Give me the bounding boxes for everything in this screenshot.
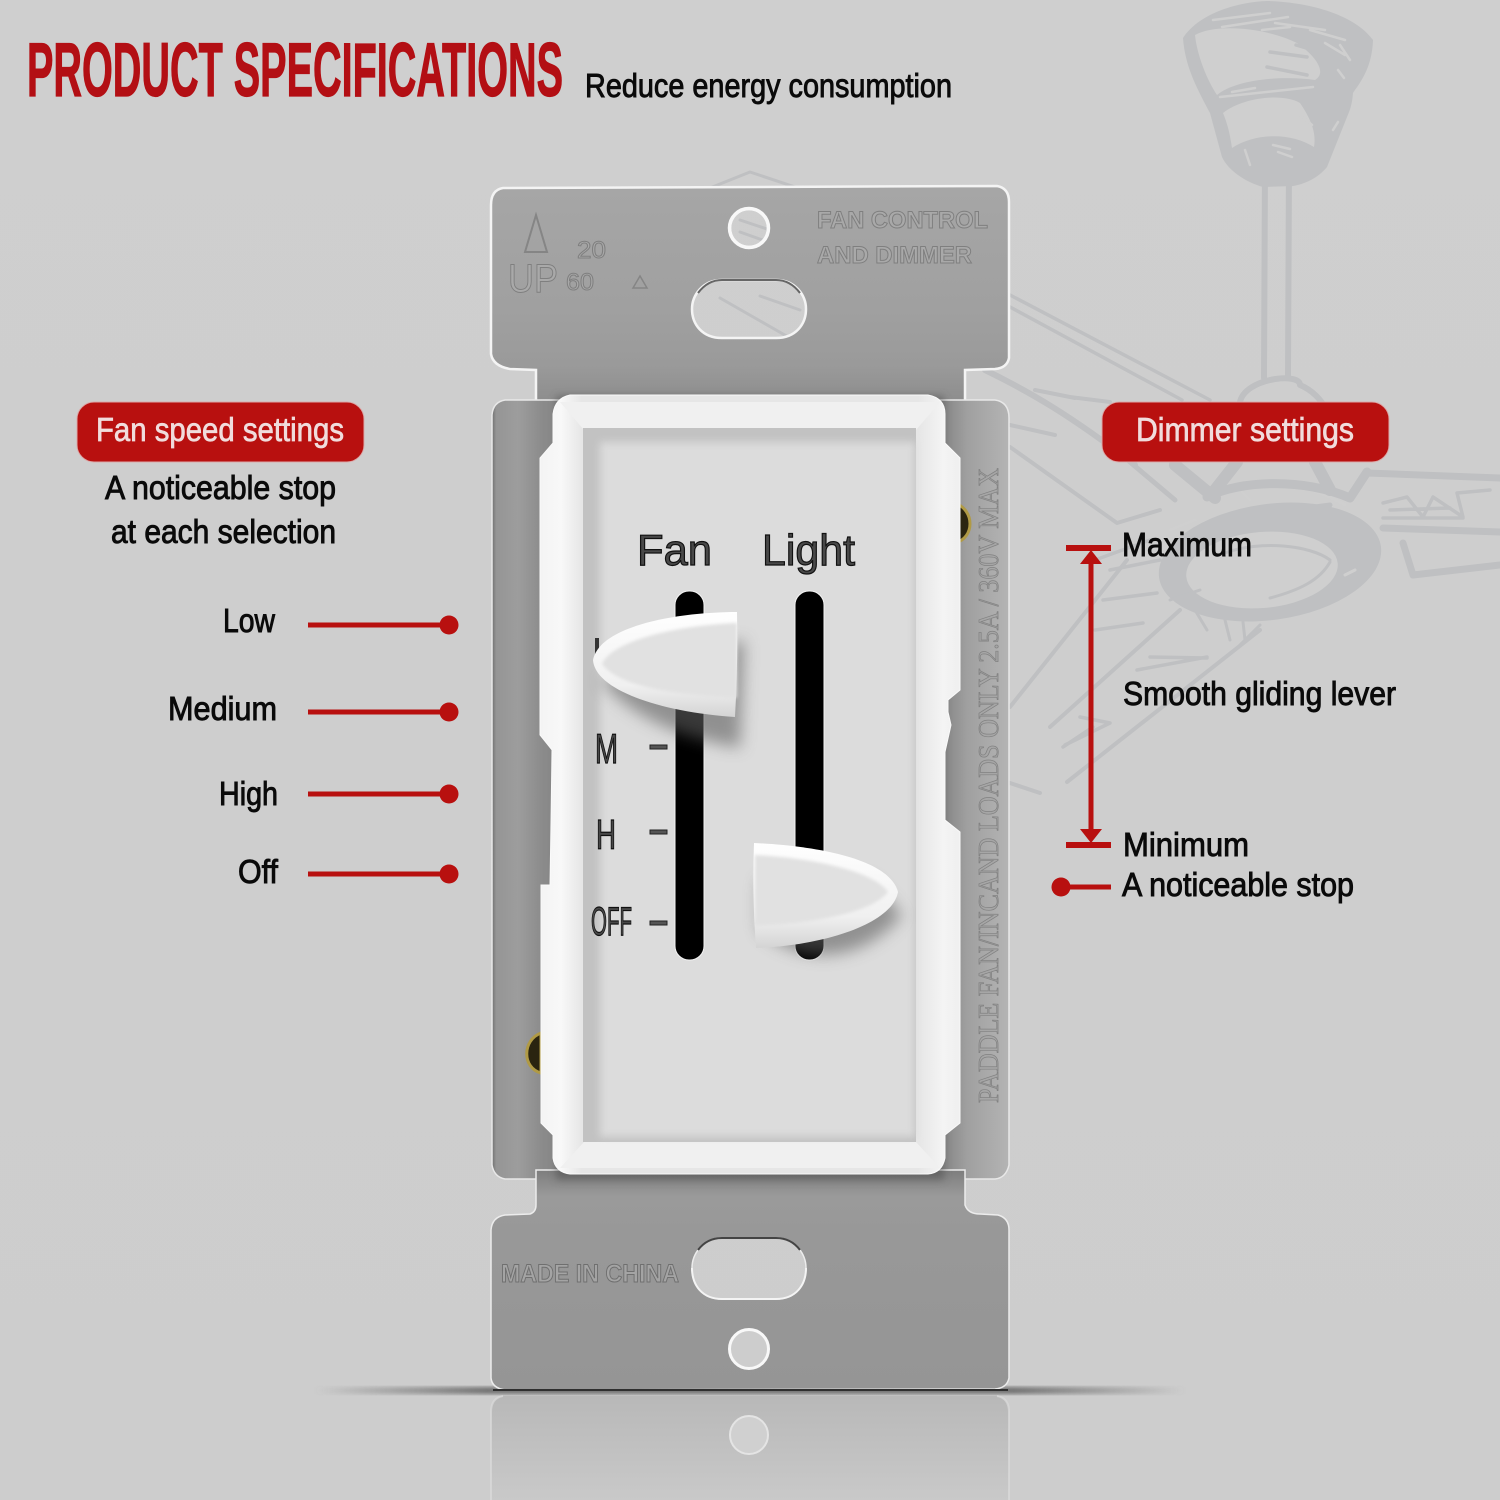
- badge: fan speed settings: [77, 402, 364, 462]
- callout: off: Off: [238, 853, 279, 890]
- fan upper left blade: [985, 295, 1210, 523]
- fan slider lever: [593, 612, 744, 748]
- arrow: dimmer range: [1066, 548, 1111, 845]
- fan downrod: [1264, 165, 1289, 378]
- light slider lever: [753, 843, 902, 955]
- callout: off: [238, 853, 458, 890]
- callout: low: [223, 602, 458, 639]
- fan speed description: [105, 469, 336, 550]
- cover drop shadow: [556, 396, 944, 1180]
- cover body: [540, 395, 960, 1174]
- plate reflection: [491, 1396, 1009, 1500]
- fan lower left blade: [1010, 540, 1260, 793]
- plate embossed marks: [501, 207, 1005, 1288]
- inner panel: [583, 428, 916, 1142]
- callout: noticeable stop: A noticeable stop: [1122, 866, 1354, 903]
- badge: dimmer settings: [1102, 402, 1389, 462]
- fan and light labels: Fan: [637, 526, 712, 575]
- plate embossed marks: FAN CONTROL: [817, 207, 988, 234]
- blade seen through plate holes: [700, 172, 810, 338]
- cover bevel: [560, 402, 940, 430]
- fan speed marks: OFF: [591, 900, 632, 944]
- fan right blade: [1367, 473, 1500, 575]
- plate: bottom tab: [491, 1170, 1009, 1390]
- panel: fan speed settings: [77, 402, 458, 890]
- badge: dimmer settings: Dimmer settings: [1136, 411, 1354, 448]
- label: smooth gliding lever: Smooth gliding lever: [1123, 675, 1396, 712]
- fan canopy: [1183, 1, 1373, 187]
- fan motor: [1130, 462, 1389, 645]
- slider slots: [675, 591, 824, 960]
- fan speed description: at each selection: [111, 513, 336, 550]
- callout: high: [219, 775, 458, 812]
- fan speed marks: M: [595, 725, 618, 772]
- metal mounting plate: [491, 186, 1009, 1390]
- plate: top tab: [491, 186, 1009, 410]
- callout: high: High: [219, 775, 278, 812]
- hole rims: [692, 208, 806, 1368]
- switch cover frame: [540, 395, 960, 1180]
- badge: fan speed settings: Fan speed settings: [96, 411, 344, 448]
- ceiling fan sketch watermark: [700, 1, 1500, 793]
- fan and light labels: [637, 526, 855, 575]
- plate embossed marks: 20: [577, 237, 606, 264]
- panel: dimmer settings: [1052, 402, 1396, 903]
- plate edge shading: [536, 1178, 965, 1186]
- plate embossed marks: 60: [566, 269, 594, 296]
- callout: medium: Medium: [168, 690, 277, 727]
- brass screws: [527, 503, 970, 1073]
- callout: low: Low: [223, 602, 275, 639]
- fan hub collar: [1240, 378, 1326, 410]
- callout: medium: [168, 690, 458, 727]
- plate embossed marks: PADDLE FAN/INCAND LOADS ONLY 2.5A / 360V MAX: [973, 468, 1005, 1103]
- fan speed description: A noticeable stop: [105, 469, 336, 506]
- label: minimum: Minimum: [1123, 826, 1249, 863]
- title: PRODUCT SPECIFICATIONS: [27, 28, 563, 113]
- fan speed marks: H: [596, 811, 616, 858]
- plate embossed marks: AND DIMMER: [817, 242, 972, 269]
- floor shadow line: [315, 1387, 1185, 1394]
- fan and light labels: Light: [762, 526, 855, 575]
- subtitle: Reduce energy consumption: [585, 67, 952, 104]
- plate: middle body: [492, 400, 1009, 1179]
- fan speed marks: [591, 638, 667, 944]
- plate embossed marks: MADE IN CHINA: [501, 1260, 679, 1288]
- plate embossed marks: UP: [508, 257, 558, 301]
- label: maximum: Maximum: [1122, 526, 1252, 563]
